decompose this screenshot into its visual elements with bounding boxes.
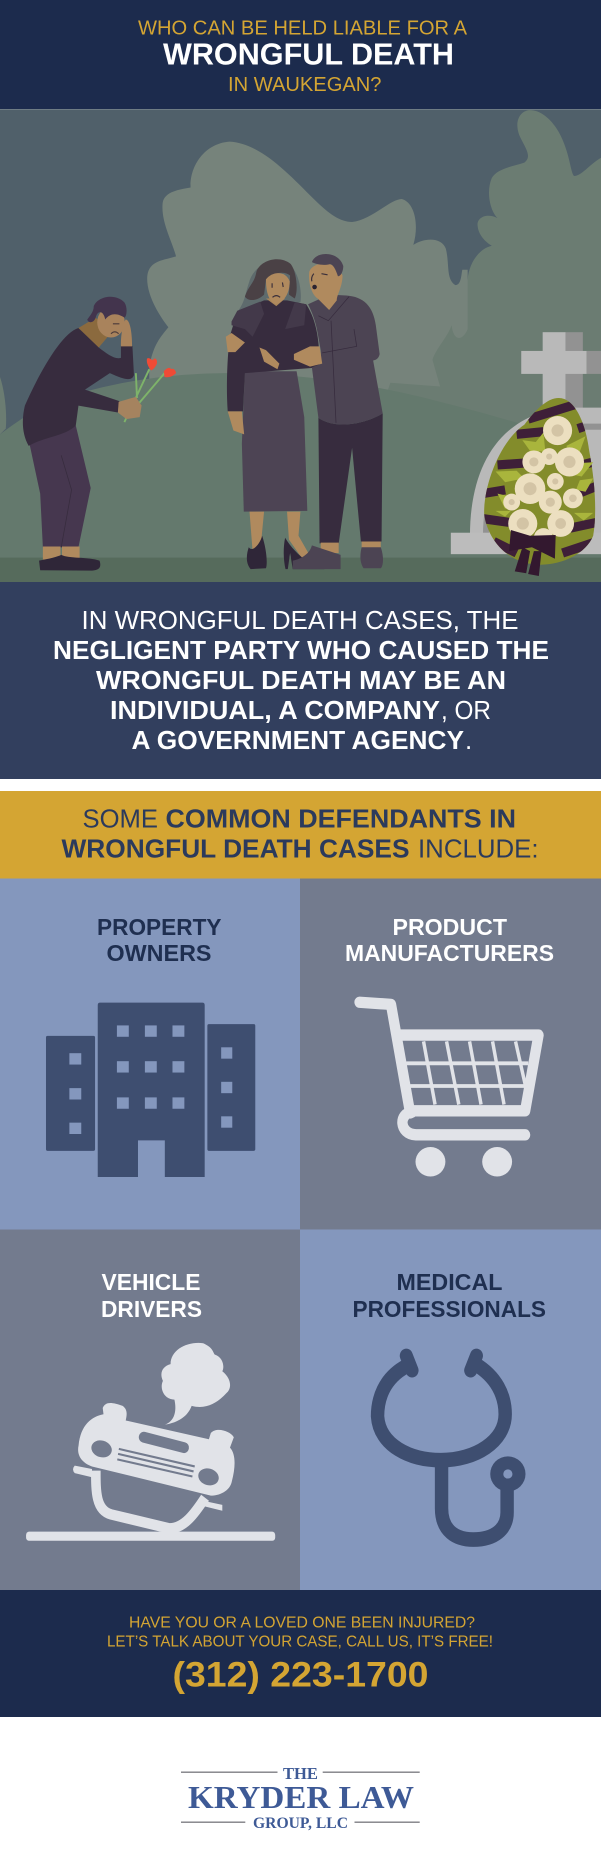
figure: man with flowers (23, 297, 176, 571)
label: vehicle drivers (101, 1269, 202, 1322)
label: medical professionals: MEDICAL (396, 1269, 502, 1295)
label: medical professionals: PROFESSIONALS (352, 1296, 546, 1322)
figure: comforting man (226, 254, 383, 569)
panel: product manufacturers (300, 878, 601, 1230)
label: medical professionals (352, 1269, 546, 1322)
logo: The Kryder Law Group, LLC: THE (283, 1764, 318, 1783)
icon: office buildings (46, 1003, 255, 1177)
label: vehicle drivers: VEHICLE (102, 1269, 200, 1295)
call to action text: LET’S TALK ABOUT YOUR CASE, CALL US, IT’S FREE! (107, 1634, 493, 1650)
panel: property owners (0, 878, 300, 1230)
title: IN WAUKEGAN? (228, 74, 382, 96)
intro text: NEGLIGENT PARTY WHO CAUSED THE (53, 635, 549, 665)
icon: shopping cart (360, 1002, 539, 1177)
panel: medical professionals (300, 1230, 601, 1590)
intro text: , OR (441, 695, 491, 725)
header banner (0, 0, 601, 109)
call to action banner (0, 1590, 601, 1717)
panel: defendants heading (0, 791, 601, 878)
label: vehicle drivers: DRIVERS (101, 1296, 202, 1322)
heading text: SOME (82, 804, 158, 834)
intro text: WRONGFUL DEATH MAY BE AN (96, 665, 506, 695)
call to action text (107, 1614, 493, 1650)
logo: The Kryder Law Group, LLC: KRYDER LAW (188, 1779, 414, 1815)
phone number: (312) 223-1700 (172, 1656, 428, 1694)
intro text: IN WRONGFUL DEATH CASES, THE (82, 605, 518, 635)
intro text: INDIVIDUAL, A COMPANY (110, 695, 440, 725)
label: product manufacturers (345, 914, 554, 966)
heading text: WRONGFUL DEATH CASES (62, 834, 410, 864)
gravestone (451, 332, 601, 554)
funeral wreath (482, 398, 597, 576)
title: WHO CAN BE HELD LIABLE FOR A (138, 18, 468, 40)
panel: intro statement (0, 582, 601, 779)
label: property owners: OWNERS (106, 940, 212, 966)
call to action text: HAVE YOU OR A LOVED ONE BEEN INJURED? (129, 1614, 475, 1632)
title (138, 18, 468, 96)
intro text (53, 605, 549, 755)
logo: The Kryder Law Group, LLC (181, 1764, 420, 1832)
illustration: mourners at a cemetery (0, 109, 601, 582)
label: property owners (97, 914, 222, 966)
heading text (62, 804, 538, 864)
intro text: . (465, 725, 472, 755)
title: WRONGFUL DEATH (163, 38, 454, 72)
intro text: A GOVERNMENT AGENCY (132, 725, 464, 755)
heading text: INCLUDE: (418, 834, 538, 864)
heading text: COMMON DEFENDANTS IN (166, 804, 516, 834)
panel: vehicle drivers (0, 1230, 300, 1590)
label: property owners: PROPERTY (97, 914, 222, 940)
label: product manufacturers: PRODUCT (392, 914, 508, 940)
icon: stethoscope (378, 1356, 526, 1540)
icon: overturned car (26, 1343, 275, 1541)
label: product manufacturers: MANUFACTURERS (345, 940, 554, 966)
logo: The Kryder Law Group, LLC: GROUP, LLC (253, 1815, 348, 1832)
figure: grieving woman (227, 259, 325, 569)
